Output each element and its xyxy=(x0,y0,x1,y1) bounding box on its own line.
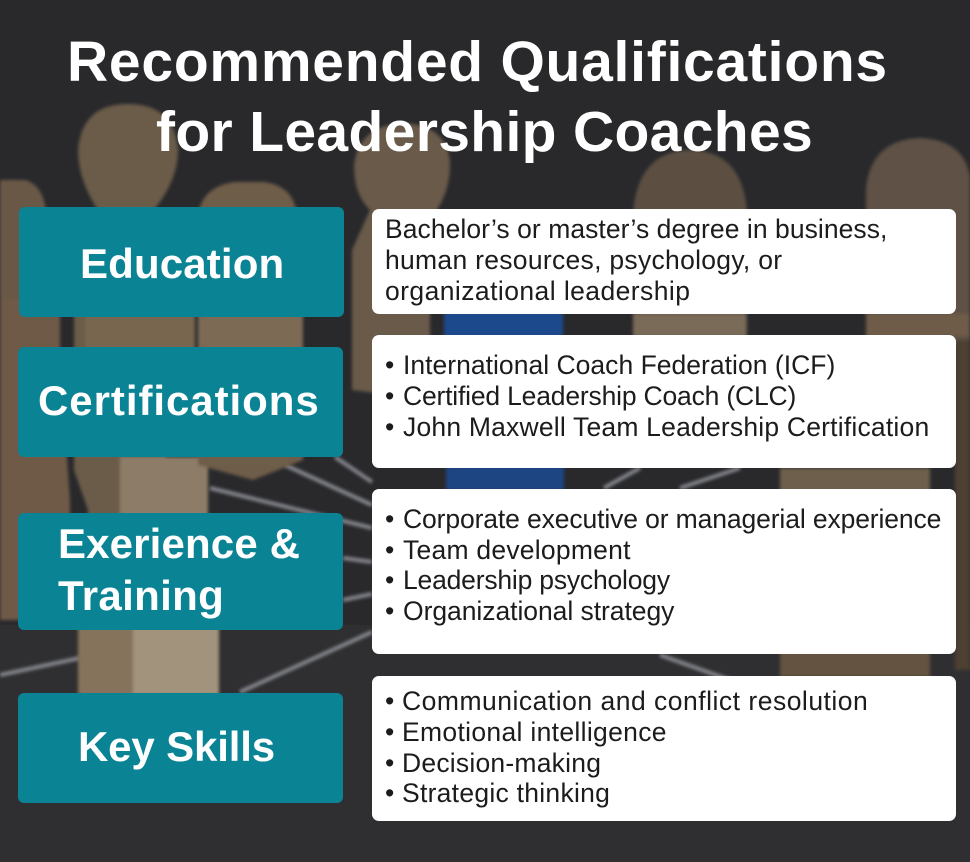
text panel: key skills: • xyxy=(385,778,394,808)
text panel: experience: Team development xyxy=(403,535,631,565)
text panel: education xyxy=(372,209,956,314)
text panel: experience: • xyxy=(385,565,394,595)
text panel: experience: • xyxy=(385,504,394,534)
text panel: key skills: Emotional intelligence xyxy=(402,717,667,747)
text panel: key skills: Decision-making xyxy=(402,748,601,778)
text panel: experience: Organizational strategy xyxy=(403,596,674,626)
text panel: certifications: Certified Leadership Coach (CLC) xyxy=(403,381,796,411)
label: Education xyxy=(19,207,344,317)
text panel: certifications: • xyxy=(385,350,394,380)
text panel: certifications: John Maxwell Team Leadership Certification xyxy=(403,412,929,442)
text panel: certifications: • xyxy=(385,381,394,411)
title: for Leadership Coaches xyxy=(156,100,813,164)
text panel: key skills: • xyxy=(385,748,394,778)
text panel: experience: Leadership psychology xyxy=(403,565,670,595)
label: Certifications: Certifications xyxy=(38,377,320,424)
text panel: key skills: Strategic thinking xyxy=(402,778,610,808)
text panel: experience: Corporate executive or managerial experience xyxy=(403,504,941,534)
label: Key Skills xyxy=(18,693,343,803)
text panel: key skills xyxy=(372,676,956,821)
label: Key Skills: Key Skills xyxy=(78,723,275,770)
text panel: experience: • xyxy=(385,535,394,565)
title: Recommended Qualifications xyxy=(67,30,888,94)
text panel: key skills: Communication and conflict resolution xyxy=(402,686,868,716)
text panel: education: human resources, psychology, or xyxy=(385,245,782,275)
text panel: education: Bachelor’s or master’s degree in business, xyxy=(385,214,887,244)
text panel: experience: • xyxy=(385,596,394,626)
text panel: certifications xyxy=(372,335,956,468)
text panel: certifications: • xyxy=(385,412,394,442)
text panel: certifications: International Coach Federation (ICF) xyxy=(403,350,835,380)
text panel: key skills: • xyxy=(385,717,394,747)
label: Experience and Training: Exerience & xyxy=(58,520,300,567)
label: Certifications xyxy=(18,347,343,457)
label: Experience and Training xyxy=(18,513,343,630)
label: Experience and Training: Training xyxy=(58,572,224,619)
text panel: key skills: • xyxy=(385,686,394,716)
text panel: education: organizational leadership xyxy=(385,276,690,306)
text panel: experience xyxy=(372,489,956,654)
label: Education: Education xyxy=(80,240,284,287)
title xyxy=(67,30,888,164)
